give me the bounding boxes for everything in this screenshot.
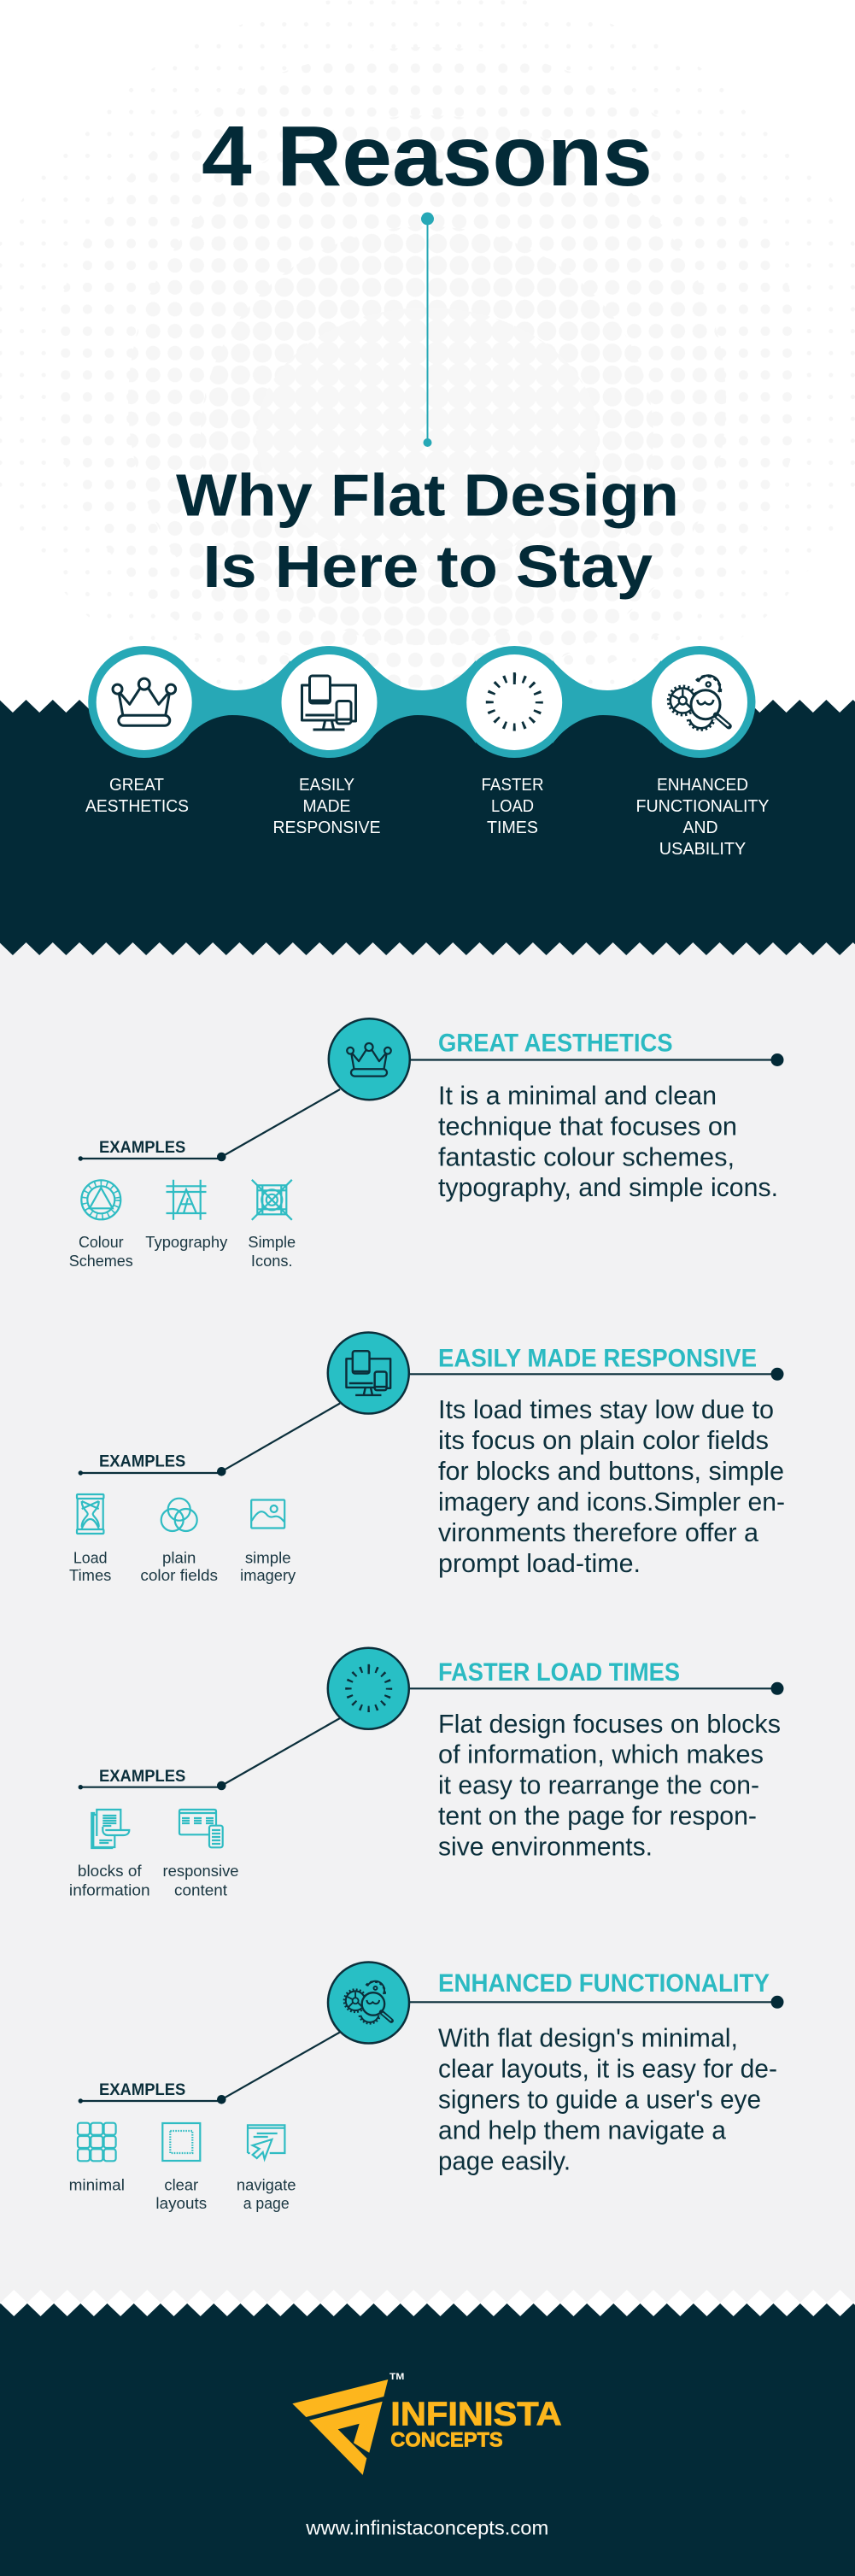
connector lines — [79, 1682, 784, 1790]
label: faster load times: TIMES — [487, 819, 538, 837]
label: clear layouts: layouts — [155, 2195, 207, 2212]
connector line between titles — [421, 212, 434, 447]
label: enhanced functionality and usability: AND — [683, 819, 717, 837]
sub wordmark: CONCEPTS — [390, 2428, 503, 2451]
body text: and help them navigate a — [438, 2116, 726, 2145]
label: clear layouts: clear — [164, 2176, 198, 2193]
label: simple icons: Simple — [248, 1234, 296, 1251]
examples label: EXAMPLES — [99, 2080, 185, 2099]
icon: responsive window and phone — [179, 1810, 223, 1847]
label: plain color fields: plain — [162, 1549, 196, 1566]
body text: sive environments. — [438, 1832, 653, 1861]
body text: Its load times stay low due to — [438, 1395, 774, 1424]
examples label: EXAMPLES — [99, 1138, 185, 1157]
label: faster load times — [482, 776, 543, 837]
label: responsive content: content — [174, 1881, 227, 1898]
body text: clear layouts, it is easy for de- — [438, 2054, 777, 2083]
body text: technique that focuses on — [438, 1112, 737, 1141]
panel: great aesthetics — [69, 1018, 784, 1270]
body text: It is a minimal and clean — [438, 1082, 717, 1111]
panel: footer — [0, 2303, 855, 2576]
label: faster load times: FASTER — [482, 776, 543, 795]
icon: devices — [302, 676, 355, 730]
label: enhanced functionality and usability — [635, 776, 769, 859]
connector lines — [79, 1053, 784, 1161]
label: load times — [69, 1549, 111, 1584]
heading: FASTER LOAD TIMES — [438, 1658, 680, 1687]
label: blocks of information — [69, 1863, 150, 1898]
label: colour schemes: Schemes — [69, 1253, 133, 1270]
label: navigate a page: a page — [243, 2195, 290, 2212]
body text: page easily. — [438, 2147, 571, 2176]
examples label: EXAMPLES — [99, 1452, 185, 1471]
heading: EASILY MADE RESPONSIVE — [438, 1344, 757, 1372]
label: easily made responsive — [273, 776, 381, 837]
label: clear layouts — [155, 2176, 207, 2212]
body text: for blocks and buttons, simple — [438, 1457, 784, 1486]
panel: faster load times — [69, 1648, 784, 1898]
label: responsive content: responsive — [162, 1863, 239, 1880]
icon: hourglass — [77, 1494, 103, 1534]
label: simple imagery — [240, 1549, 296, 1584]
icon: loading spinner — [489, 672, 539, 727]
label: easily made responsive: EASILY — [299, 776, 354, 795]
icon: documents — [91, 1810, 129, 1848]
connector lines — [79, 1368, 784, 1476]
icon: gears and magnifier — [668, 676, 729, 730]
label: responsive content — [162, 1863, 239, 1898]
examples label: EXAMPLES — [99, 1767, 185, 1786]
panel: easily made responsive — [69, 1333, 785, 1584]
connector lines — [79, 1996, 784, 2104]
label: plain color fields — [140, 1549, 218, 1584]
label: easily made responsive: RESPONSIVE — [273, 819, 381, 837]
label: load times: Times — [69, 1567, 111, 1584]
label: great aesthetics: GREAT — [109, 776, 164, 795]
body text: signers to guide a user's eye — [438, 2085, 761, 2114]
icon: devices badge — [328, 1333, 409, 1413]
body text — [438, 1395, 785, 1578]
subtitle — [176, 461, 679, 600]
website url: www.infinistaconcepts.com — [305, 2517, 548, 2539]
label: colour schemes — [69, 1234, 133, 1270]
subtitle: Why Flat Design — [176, 461, 679, 528]
icon: picture — [251, 1500, 284, 1528]
icon: typography grid — [166, 1180, 207, 1220]
body text: prompt load-time. — [438, 1549, 641, 1578]
label: easily made responsive: MADE — [302, 797, 350, 816]
body text: imagery and icons.Simpler en- — [438, 1488, 785, 1517]
trademark: TM — [389, 2372, 404, 2382]
heading: ENHANCED FUNCTIONALITY — [438, 1969, 770, 1998]
label: plain color fields: color fields — [140, 1567, 218, 1584]
panel: page background grey — [0, 940, 855, 2307]
body text — [438, 1082, 778, 1202]
label: blocks of information: information — [69, 1881, 150, 1898]
label: enhanced functionality and usability: FUNCTIONALITY — [635, 797, 769, 816]
label: simple icons — [248, 1234, 296, 1270]
icon: overlapping rings — [161, 1499, 197, 1531]
label: blocks of information: blocks of — [78, 1863, 143, 1880]
panel: dark zigzag band — [0, 700, 855, 955]
icon: colour wheel — [81, 1180, 120, 1219]
body text: With flat design's minimal, — [438, 2023, 738, 2052]
body text — [438, 1710, 781, 1861]
label: simple icons: Icons. — [251, 1253, 293, 1270]
label: load times: Load — [73, 1549, 108, 1566]
body text: of information, which makes — [438, 1740, 764, 1769]
icon: gears badge — [328, 1962, 409, 2044]
title: 4 Reasons: 4 Reasons — [202, 109, 653, 204]
label: great aesthetics — [85, 776, 189, 816]
label: simple imagery: imagery — [240, 1567, 296, 1584]
panel: footer white diamond band — [0, 2290, 855, 2317]
label: faster load times: LOAD — [491, 797, 534, 816]
icon: clear layout frame — [162, 2123, 200, 2161]
logo: infinista concepts — [292, 2372, 562, 2475]
icon: simple icon grid — [252, 1180, 292, 1220]
wordmark: INFINISTA — [390, 2396, 562, 2432]
body text — [438, 2023, 777, 2176]
body text: typography, and simple icons. — [438, 1173, 778, 1202]
body text: its focus on plain color fields — [438, 1426, 769, 1455]
icon: navigate window and cursor — [248, 2125, 284, 2159]
panel: teal icon chain — [88, 646, 755, 758]
body text: fantastic colour schemes, — [438, 1142, 735, 1171]
label: minimal: minimal — [69, 2176, 125, 2193]
panel: enhanced functionality — [69, 1962, 783, 2212]
label: enhanced functionality and usability: USABILITY — [659, 840, 746, 859]
subtitle: Is Here to Stay — [203, 533, 653, 600]
heading: GREAT AESTHETICS — [438, 1030, 673, 1058]
label: navigate a page: navigate — [237, 2176, 296, 2193]
label: simple imagery: simple — [245, 1549, 291, 1566]
body text: vironments therefore offer a — [438, 1518, 758, 1547]
body text: it easy to rearrange the con- — [438, 1771, 759, 1800]
logo mark — [292, 2379, 388, 2475]
label: enhanced functionality and usability: ENHANCED — [657, 776, 748, 795]
icon: nine-cell grid — [78, 2123, 116, 2161]
label: great aesthetics: AESTHETICS — [85, 797, 189, 816]
icon: spinner badge — [328, 1648, 409, 1729]
label: typography: Typography — [145, 1234, 227, 1251]
halftone dot background — [0, 0, 855, 743]
label: colour schemes: Colour — [79, 1234, 124, 1251]
icon: crown — [113, 678, 176, 725]
label: navigate a page — [237, 2176, 296, 2212]
body text: Flat design focuses on blocks — [438, 1710, 781, 1739]
icon: crown badge — [329, 1018, 410, 1100]
body text: tent on the page for respon- — [438, 1801, 757, 1830]
